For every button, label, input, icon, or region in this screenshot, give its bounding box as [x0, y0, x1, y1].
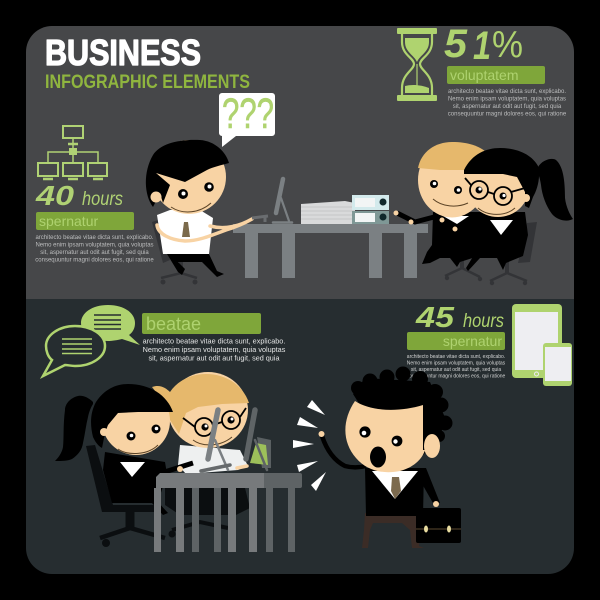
blond body [422, 212, 482, 267]
icon: tablets [512, 304, 572, 386]
label bar: voluptatem: voluptatem [450, 67, 518, 83]
body [103, 452, 168, 515]
label bar: spernatur right [407, 332, 505, 350]
mouth [370, 446, 386, 468]
arms [157, 219, 252, 241]
jacket [365, 468, 424, 516]
stat: 51%: 5 [444, 22, 468, 66]
woman body [466, 212, 528, 271]
head [345, 401, 425, 472]
eyes [126, 432, 136, 440]
eyes [178, 189, 188, 199]
blond head [418, 142, 486, 218]
characters: couple at desk [394, 142, 573, 285]
label bar: spernatur: spernatur [39, 213, 98, 229]
text block: right bottom: consequuntur magni dolores eos, qui ratione [407, 374, 506, 380]
tablet [257, 437, 271, 468]
briefcase [416, 508, 461, 543]
legs [167, 254, 224, 277]
stat: 40 hours: hours [82, 189, 123, 210]
keyboard [252, 216, 268, 222]
computer monitor [273, 179, 292, 222]
icon: network of monitors [38, 126, 107, 179]
character: woman at bottom desk [55, 384, 193, 547]
stat: 51%: % [492, 24, 523, 66]
character: man at desk [146, 140, 268, 284]
tie [391, 477, 401, 499]
stat: 45 hours: hours [463, 311, 504, 332]
text block: right top: Nemo enim ipsam voluptatem, quia voluptas [448, 96, 566, 102]
text block: left top: sit, aspernatur aut odit aut fugit, sed quia [40, 250, 149, 256]
icon: hourglass [397, 28, 437, 101]
paper stack [301, 201, 355, 224]
character: blond coworker at bottom desk [152, 372, 271, 538]
pointing arms [397, 213, 434, 222]
ear [424, 434, 440, 458]
mouth [118, 445, 158, 454]
tie [182, 222, 190, 237]
text block: right bottom [407, 354, 506, 380]
glasses [465, 178, 525, 205]
shirt [372, 471, 418, 499]
text block: beatae: sit, aspernatur aut odit aut fugit, sed quia [148, 354, 280, 362]
hair [146, 140, 229, 207]
text block: beatae: Nemo enim ipsam voluptatem, quia voluptas [143, 345, 286, 354]
text block: left top: architecto beatae vitae dicta sunt, explicabo. [35, 235, 154, 241]
head [102, 387, 170, 455]
speech bubble: question marks [219, 90, 275, 147]
binders [352, 195, 389, 224]
stat: 40 hours [35, 180, 123, 211]
shirt [178, 445, 248, 474]
panel: bottom section [26, 299, 574, 574]
head [168, 372, 248, 448]
text block: left top [35, 235, 154, 264]
text block: right top: sit, aspernatur aut odit aut fugit, sed quia [453, 104, 562, 110]
monitors on bottom desk [201, 410, 267, 471]
hair [152, 374, 249, 434]
desk: top [233, 224, 428, 278]
label bar: beatae [142, 313, 261, 334]
eyes [359, 426, 371, 438]
title: BUSINESS [45, 32, 201, 73]
stat: 45 hours [415, 302, 504, 334]
hair curls [351, 366, 452, 455]
hair [91, 384, 173, 448]
text block: right top: consequuntur magni dolores eos, qui ratione [448, 112, 567, 118]
label bar: voluptatem [447, 66, 545, 84]
stat: 51%: 1 [473, 24, 491, 68]
ponytail [55, 396, 93, 461]
chair [86, 445, 155, 512]
trousers [362, 513, 424, 548]
speech bubble: question marks: ??? [222, 90, 274, 138]
chair [152, 220, 170, 263]
hands [237, 466, 247, 468]
subtitle: INFOGRAPHIC ELEMENTS [45, 72, 250, 93]
shirt [157, 210, 213, 254]
label bar: beatae: beatae [146, 314, 201, 334]
text block: beatae [143, 336, 286, 362]
text block: left top: consequuntur magni dolores eos, qui ratione [35, 258, 154, 264]
text block: right bottom: architecto beatae vitae dicta sunt, explicabo. [407, 354, 505, 360]
icon: speech bubbles [43, 305, 140, 376]
text block: beatae: architecto beatae vitae dicta sunt, explicabo. [143, 336, 285, 346]
head [152, 140, 226, 214]
label bar: spernatur [36, 212, 134, 230]
text block: right top: architecto beatae vitae dicta sunt, explicabo. [448, 89, 566, 95]
woman head [467, 157, 529, 217]
panel: top section [26, 26, 574, 300]
text block: right top [448, 89, 567, 118]
text block: right bottom: Nemo enim ipsam voluptatem, quia voluptas [407, 360, 506, 366]
stat: 45 hours: 45 [415, 302, 455, 334]
glasses [183, 408, 246, 436]
label bar: spernatur right: spernatur [443, 333, 502, 349]
ear [150, 192, 162, 202]
chairs [518, 222, 537, 263]
ponytail [536, 159, 573, 221]
raised arm [322, 436, 366, 468]
character: shouting man [318, 366, 452, 548]
desk: bottom [154, 473, 302, 552]
mouth [171, 203, 211, 212]
stat: 51% [444, 22, 523, 68]
text block: left top: Nemo enim ipsam voluptatem, quia voluptas [35, 242, 154, 248]
dark legs under desk [165, 488, 250, 515]
icon: shout lines [293, 400, 326, 491]
text block: right bottom: sit, aspernatur aut odit aut fugit, sed quia [411, 367, 501, 373]
stat: 40 hours: 40 [35, 180, 75, 211]
